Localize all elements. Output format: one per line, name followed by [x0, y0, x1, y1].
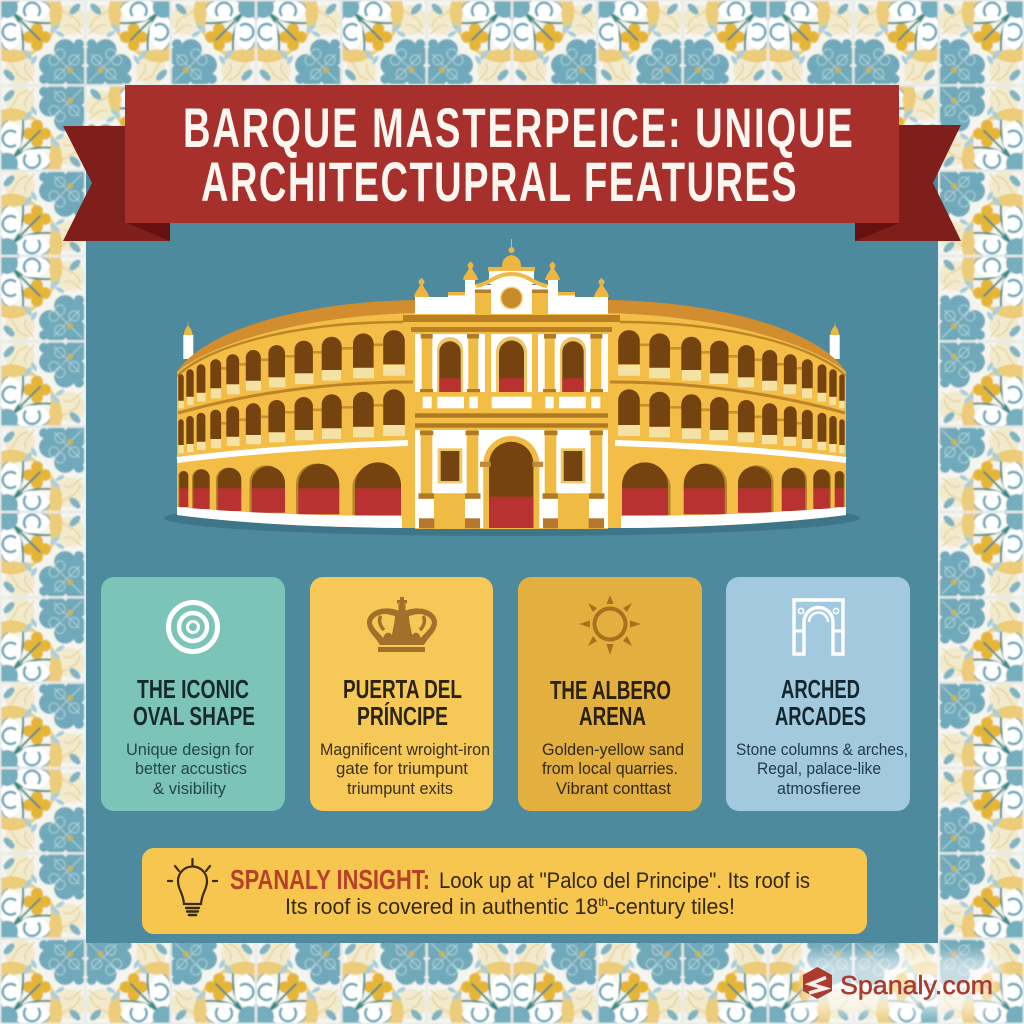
description: Magnificent wroight-iron — [320, 740, 490, 759]
description: from local quarries. — [542, 759, 678, 778]
insight text: -century tiles! — [608, 894, 735, 919]
card: the iconic oval shape — [101, 577, 285, 811]
heading: THE ICONIC — [137, 674, 249, 704]
right wing and facade half — [511, 262, 846, 529]
panel: teal background — [86, 171, 938, 943]
description — [542, 740, 684, 798]
icon: lightbulb — [168, 859, 217, 915]
central facade — [476, 239, 547, 528]
insight text: Its roof is covered in authentic 18 — [285, 894, 608, 919]
card: puerta del principe — [310, 577, 493, 811]
insight text: th — [598, 895, 608, 909]
heading — [133, 674, 255, 731]
heading — [343, 674, 462, 731]
wordmark: Spanaly.com — [840, 970, 993, 1000]
title text: BARQUE MASTERPEICE: UNIQUE — [183, 98, 853, 160]
heading: ARENA — [579, 701, 646, 731]
heading: ARCHED — [781, 674, 860, 704]
icon: crown — [367, 597, 437, 652]
description: Regal, palace-like — [757, 759, 881, 778]
ribbon tail: right — [855, 125, 961, 241]
description: triumpunt exits — [347, 779, 453, 798]
description: atmosfieree — [777, 779, 861, 798]
heading: THE ALBERO — [550, 675, 671, 705]
logo: spanaly.com — [800, 955, 1000, 1013]
heading: PRÍNCIPE — [357, 701, 448, 731]
icon: arch — [794, 600, 843, 654]
card: arched arcades — [726, 577, 910, 811]
description: & visibility — [153, 779, 226, 798]
description: better accustics — [135, 759, 247, 778]
card: the albero arena — [518, 577, 702, 811]
title text — [183, 98, 853, 214]
description: Golden-yellow sand — [542, 740, 684, 759]
icon: sun — [579, 595, 641, 655]
description: Stone columns & arches, — [736, 740, 908, 759]
description — [736, 740, 908, 798]
left wing and facade half — [177, 262, 512, 529]
ribbon body — [125, 85, 899, 223]
description: gate for triumpunt — [336, 759, 468, 778]
heading: ARCADES — [775, 701, 866, 731]
callout: spanaly insight — [142, 848, 867, 934]
heading: PUERTA DEL — [343, 674, 462, 704]
heading: OVAL SHAPE — [133, 701, 255, 731]
ribbon tail: left — [63, 126, 170, 241]
icon: hexagon S — [803, 967, 832, 999]
description — [320, 740, 490, 798]
insight label: SPANALY INSIGHT: — [230, 864, 430, 895]
description: Unique design for — [126, 740, 254, 759]
insight text: Look up at "Palco del Principe". Its roof is — [439, 868, 810, 893]
heading — [550, 675, 671, 731]
heading — [775, 674, 866, 731]
insight text — [285, 868, 810, 919]
bullring illustration — [164, 239, 860, 536]
icon: concentric oval — [168, 602, 218, 652]
description — [126, 740, 254, 798]
description: Vibrant conttast — [556, 779, 671, 798]
title text: ARCHITECTUPRAL FEATURES — [201, 152, 797, 214]
title banner — [63, 85, 961, 241]
